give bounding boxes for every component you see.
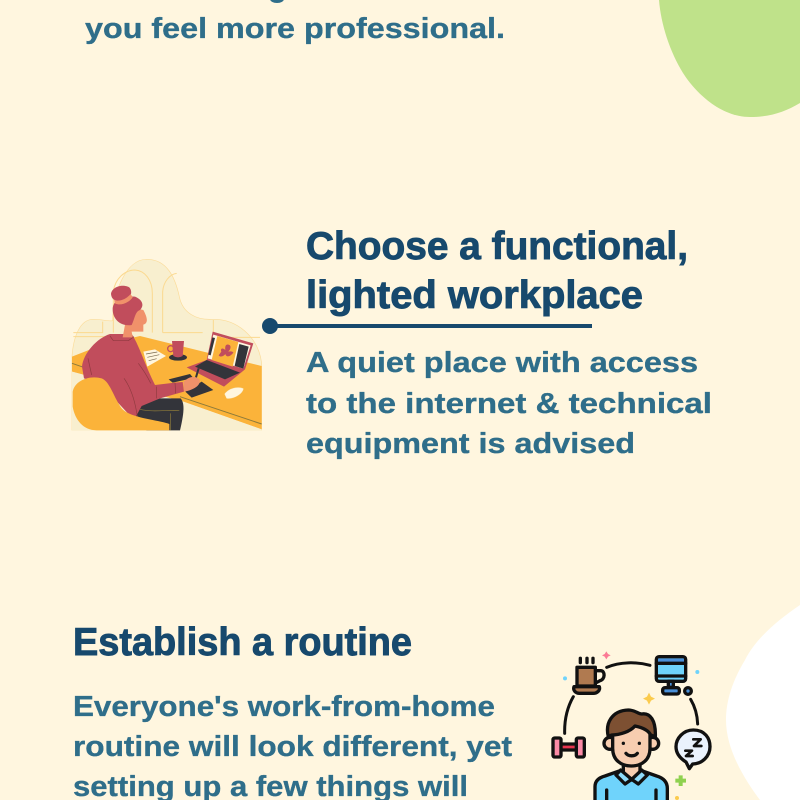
window background (72, 259, 262, 430)
hand and stylus (183, 377, 200, 392)
icon: dumbbell (553, 738, 584, 757)
icon: computer monitor (656, 657, 691, 694)
body text: routine (73, 691, 512, 800)
green blob (659, 0, 800, 117)
desk lower panel (72, 372, 262, 430)
body line 2: to the internet & technical (306, 388, 712, 420)
desk (72, 336, 262, 429)
hair (113, 296, 142, 325)
drawing tablet (185, 382, 213, 398)
legs (128, 398, 183, 430)
text: continuation of previous tip (85, 0, 505, 45)
icon: sleep bubble (676, 730, 710, 769)
coffee mug (168, 341, 187, 361)
heading: workplace (306, 225, 688, 317)
body line 1: A quiet place with access (306, 347, 698, 379)
paper (143, 349, 166, 367)
desk front edge (72, 363, 262, 424)
icon: coffee cup (574, 658, 604, 693)
keyboard (169, 374, 193, 383)
connector line with dot (262, 318, 592, 334)
face (613, 720, 650, 766)
mouse (225, 388, 243, 398)
collar (616, 770, 647, 784)
neck (623, 763, 640, 780)
body line 3: equipment is advised (306, 428, 635, 460)
arcs between icons (565, 663, 698, 733)
hair bun (111, 286, 131, 301)
routine line 2: routine will look different, yet (73, 731, 512, 763)
heading line 1: Choose a functional, (306, 225, 688, 268)
heading line 2: lighted workplace (306, 274, 643, 317)
body text: workplace (306, 347, 712, 460)
chair (73, 377, 169, 430)
eyes and smile (622, 742, 625, 745)
hair (607, 710, 655, 737)
heading: routine: Establish a routine (73, 621, 412, 664)
ears (604, 737, 616, 749)
window frames (73, 270, 260, 337)
torso and arm (82, 334, 184, 420)
hair band (114, 294, 133, 304)
clipped letter descender (270, 0, 284, 3)
illustration: woman working at laptop (72, 259, 262, 430)
illustration: daily routine cycle (553, 651, 710, 800)
white blob (726, 605, 800, 800)
icon: man (595, 710, 667, 800)
closing line: you feel more professional. (85, 13, 505, 45)
neck and face (123, 307, 147, 337)
laptop (187, 332, 253, 387)
routine line 1: Everyone's work-from-home (73, 691, 495, 723)
sparkles (563, 651, 699, 800)
shirt (595, 771, 667, 800)
